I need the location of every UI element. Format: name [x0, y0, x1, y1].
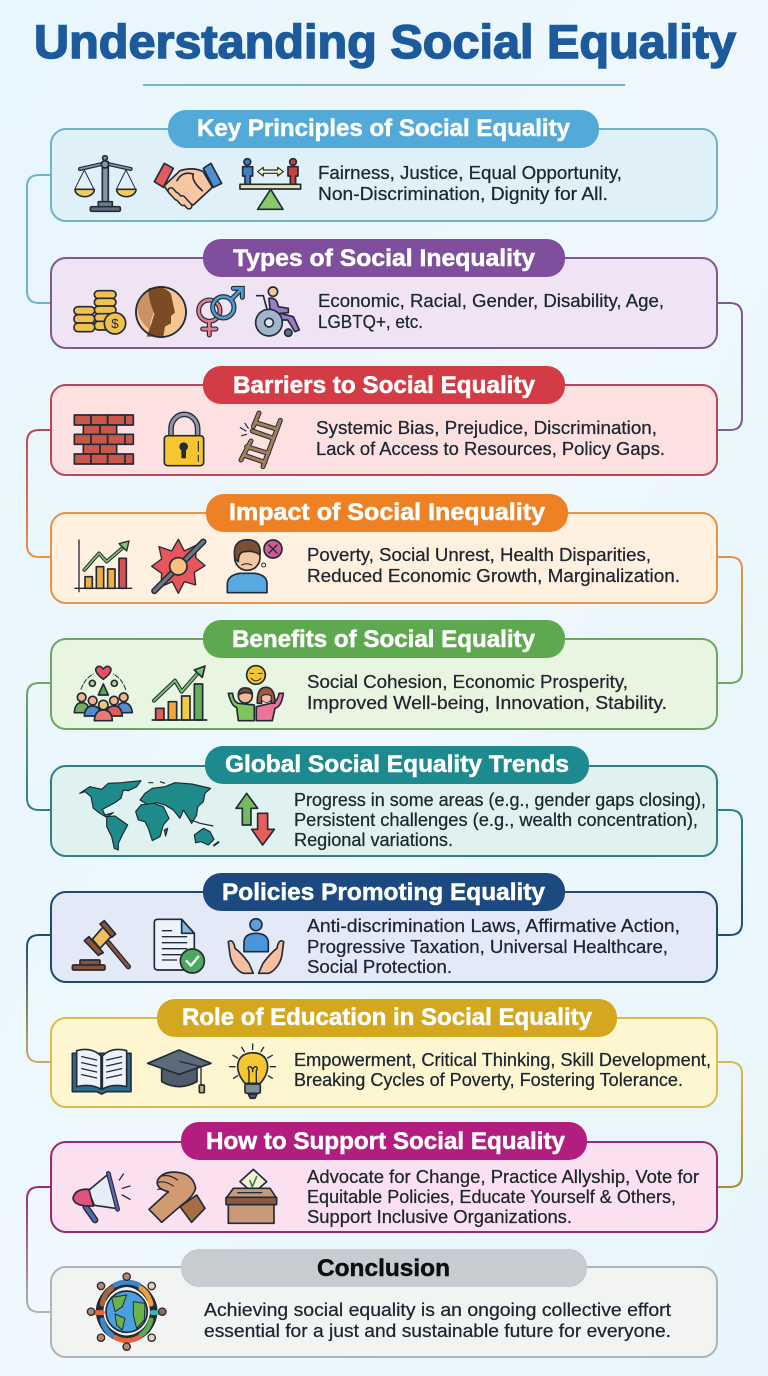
panel: types of inequality [51, 239, 717, 348]
text: key principles [318, 163, 622, 204]
heading pill: support: How to Support Social Equality [206, 1128, 566, 1155]
text: key principles: Non-Discrimination, Dignity for All. [318, 184, 608, 204]
text: benefits: Improved Well-being, Innovation, Stability. [307, 693, 667, 713]
icon: open book [72, 1049, 131, 1094]
connector: education to support [717, 1062, 742, 1187]
heading pill: types: Types of Social Inequality [233, 245, 536, 272]
text: policies: Progressive Taxation, Universal Healthcare, [307, 937, 668, 957]
heading pill: impact: Impact of Social Inequality [229, 499, 546, 526]
text: support: Advocate for Change, Practice Allyship, Vote for [307, 1167, 699, 1187]
text: global: Progress in some areas (e.g., gender gaps closing), [294, 790, 706, 810]
connector: types to barriers [717, 303, 742, 430]
icon: handshake [154, 163, 222, 206]
text: impact: Poverty, Social Unrest, Health Disparities, [307, 545, 651, 565]
panel: global trends [51, 746, 717, 856]
text: impact: Reduced Economic Growth, Marginalization. [307, 566, 680, 586]
heading pill: benefits [203, 620, 565, 658]
connector: impact to benefits [717, 557, 742, 683]
heading pill: key principles: Key Principles of Social Equality [197, 115, 571, 142]
connector: principles to types [27, 175, 51, 303]
heading pill: types [203, 239, 565, 277]
icon: scales of justice [75, 156, 136, 211]
text: global [294, 790, 706, 850]
heading pill: global: Global Social Equality Trends [225, 751, 569, 778]
heading pill: barriers [203, 366, 565, 404]
icon: gender symbols [199, 288, 242, 335]
connector: policies to education [27, 935, 51, 1062]
panel: education [51, 999, 717, 1107]
panel: benefits [51, 620, 717, 729]
icon: broken ladder [240, 413, 280, 467]
text: benefits: Social Cohesion, Economic Prosperity, [307, 672, 628, 692]
panel: key principles [51, 110, 717, 221]
icon: diverse faces [136, 287, 186, 337]
text: types [318, 291, 664, 332]
icon: protective hands [228, 919, 284, 973]
icon: megaphone [73, 1173, 130, 1220]
panel: conclusion [51, 1249, 717, 1357]
icon: light bulb [230, 1044, 276, 1098]
heading pill: policies [203, 873, 565, 911]
text: support: Support Inclusive Organizations. [307, 1207, 572, 1227]
text: global: Persistent challenges (e.g., wealth concentration), [294, 810, 698, 830]
text: key principles: Fairness, Justice, Equal Opportunity, [318, 163, 622, 183]
icon: padlock [164, 414, 204, 466]
text: education: Empowerment, Critical Thinking, Skill Development, [294, 1050, 711, 1070]
icon: clasped hands [149, 1172, 205, 1222]
heading pill: benefits: Benefits of Social Equality [232, 626, 536, 653]
text: benefits [307, 672, 667, 713]
icon: ballot box [226, 1169, 277, 1223]
text: conclusion [204, 1300, 671, 1341]
text: impact [307, 545, 680, 586]
heading pill: global [205, 746, 589, 784]
text: types: Economic, Racial, Gender, Disability, Age, [318, 291, 664, 311]
panel: barriers [51, 366, 717, 475]
icon: brick wall [74, 415, 133, 464]
icon: wheelchair [256, 287, 299, 336]
heading pill: education [157, 999, 617, 1037]
text: policies: Anti-discrimination Laws, Affirmative Action, [307, 916, 680, 936]
text: support: Equitable Policies, Educate Yourself & Others, [307, 1187, 676, 1207]
text: policies: Social Protection. [307, 957, 452, 977]
connector: benefits to trends [27, 683, 51, 810]
connector: barriers to impact [27, 430, 51, 557]
icon: policy document [154, 919, 204, 973]
heading pill: support [181, 1122, 587, 1160]
heading pill: conclusion [181, 1249, 587, 1287]
text: global: Regional variations. [294, 830, 453, 850]
connector: support to conclusion [27, 1187, 51, 1312]
heading pill: policies: Policies Promoting Equality [222, 879, 546, 906]
icon: up and down arrows [236, 793, 274, 845]
panel: support [51, 1122, 717, 1232]
panel: impact [51, 494, 717, 603]
text: barriers: Systemic Bias, Prejudice, Discrimination, [316, 418, 657, 438]
text: education: Breaking Cycles of Poverty, Fostering Tolerance. [294, 1070, 683, 1090]
panel: policies [51, 873, 717, 982]
icon: distressed person [227, 540, 282, 593]
text: barriers [316, 418, 665, 459]
icon: coins [74, 291, 126, 334]
icon: graduation cap [148, 1050, 211, 1093]
text: policies [307, 916, 680, 977]
heading pill: key principles [168, 110, 599, 148]
text: barriers: Lack of Access to Resources, Policy Gaps. [316, 439, 665, 459]
icon: world map [80, 781, 219, 850]
icon: coins: $ [111, 316, 119, 331]
title: Understanding Social Equality [34, 15, 736, 68]
connector: trends to policies [717, 810, 742, 935]
icon: gavel [72, 921, 128, 970]
icon: balance of people [240, 159, 301, 209]
icon: happy people [228, 666, 283, 721]
text: education [294, 1050, 711, 1090]
heading pill: impact [206, 494, 568, 532]
text: conclusion: Achieving social equality is an ongoing collective effort [204, 1300, 671, 1320]
heading pill: conclusion: Conclusion [317, 1255, 450, 1282]
icon: people around globe [87, 1273, 166, 1350]
text: support [307, 1167, 699, 1227]
text: conclusion: essential for a just and sustainable future for everyone. [204, 1321, 671, 1341]
heading pill: barriers: Barriers to Social Equality [233, 372, 536, 399]
icon: declining chart [75, 540, 132, 592]
heading pill: education: Role of Education in Social Equality [182, 1004, 593, 1031]
icon: social unrest burst [152, 539, 205, 593]
icon: community with heart [74, 666, 132, 721]
text: types: LGBTQ+, etc. [318, 312, 423, 332]
icon: growth chart [152, 666, 207, 720]
